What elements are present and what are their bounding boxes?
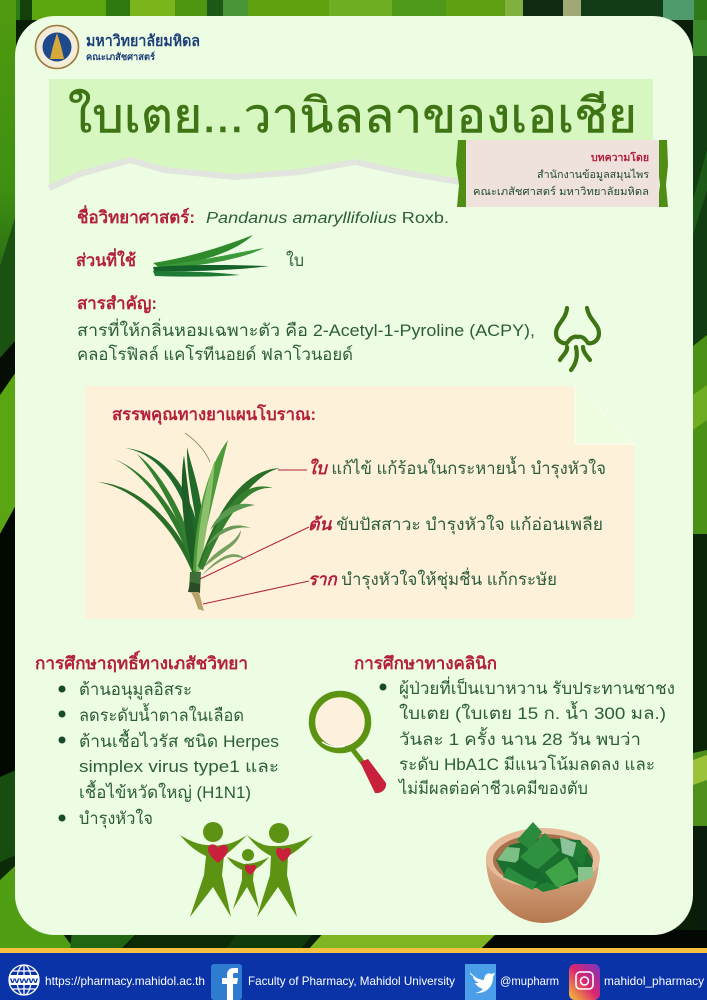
- icon: family with hearts: [180, 822, 313, 917]
- footer: twitter: [465, 964, 559, 1000]
- text: part used: ใบ: [286, 250, 304, 270]
- list: pharmacological studies: ลดระดับน้ำตาลในเลือด: [79, 703, 244, 725]
- author box: คณะเภสัชศาสตร์ มหาวิทยาลัยมหิดล: [473, 185, 649, 198]
- list: clinical studies: ใบเตย (ใบเตย 15 ก. น้ำ 300 มล.): [399, 701, 666, 723]
- footer: website: https://pharmacy.mahidol.ac.th: [45, 974, 205, 988]
- bottom strip: [0, 930, 707, 950]
- footer: blue bar: [0, 953, 707, 1000]
- left strip: [0, 0, 75, 950]
- text: stem uses: ต้น ขับปัสสาวะ บำรุงหัวใจ แก้อ่อนเพลีย: [308, 514, 603, 535]
- university name: [86, 32, 200, 63]
- author box: สำนักงานข้อมูลสมุนไพร: [537, 168, 649, 181]
- image: bowl of cut pandan: [486, 822, 600, 923]
- icon: pandan leaves: [153, 235, 269, 277]
- list: pharmacological studies: simplex virus type1 และ: [79, 757, 279, 776]
- list: clinical studies: ไม่มีผลต่อค่าชีวเคมีของตับ: [397, 778, 588, 798]
- list: pharmacological studies: ต้านเชื้อไวรัส ชนิด Herpes: [79, 729, 279, 751]
- heading: pharmacological studies: การศึกษาฤทธิ์ทางเภสัชวิทยา: [35, 650, 248, 673]
- title: ใบเตย...วานิลลาของเอเชีย: [68, 88, 637, 143]
- footer: facebook: [211, 964, 455, 1000]
- part used label: ส่วนที่ใช้: [76, 248, 136, 270]
- list: pharmacological studies: [58, 680, 279, 829]
- top strip: [0, 0, 707, 20]
- list: pharmacological studies: เชื้อไข้หวัดใหญ่ (H1N1): [79, 780, 251, 802]
- university name: คณะเภสัชศาสตร์: [86, 51, 156, 63]
- footer: twitter: @mupharm: [500, 974, 559, 988]
- key compounds: สารสำคัญ:: [77, 294, 157, 314]
- author box: บทความโดย: [591, 151, 649, 164]
- scientific name: Pandanus amaryllifolius Roxb.: [206, 210, 449, 227]
- panel: traditional uses: [85, 386, 634, 619]
- logo: university seal: [36, 26, 78, 68]
- text: leaf uses: ใบ แก้ไข้ แก้ร้อนในกระหายน้ำ บำรุงหัวใจ: [308, 456, 606, 479]
- author box: [456, 140, 668, 207]
- university name: มหาวิทยาลัยมหิดล: [86, 32, 200, 50]
- icon: nose: [556, 308, 599, 370]
- heading: traditional uses: สรรพคุณทางยาแผนโบราณ:: [112, 404, 316, 425]
- title band with torn edge: [49, 79, 653, 188]
- illustration: pandan plant: [98, 433, 280, 611]
- list: clinical studies: วันละ 1 ครั้ง นาน 28 วัน พบว่า: [399, 727, 641, 749]
- footer: facebook: Faculty of Pharmacy, Mahidol University: [248, 974, 455, 988]
- text: root uses: ราก บำรุงหัวใจให้ชุ่มชื่น แก้กระษัย: [308, 567, 557, 590]
- key compounds: สารที่ให้กลิ่นหอมเฉพาะตัว คือ 2-Acetyl-1-Pyroline (ACPY),: [77, 318, 535, 340]
- list: clinical studies: ระดับ HbA1C มีแนวโน้มลดลง และ: [399, 754, 655, 774]
- footer: instagram: [569, 964, 704, 1000]
- scientific name: [77, 205, 449, 227]
- list: pharmacological studies: ต้านอนุมูลอิสระ: [79, 680, 192, 700]
- list: pharmacological studies: บำรุงหัวใจ: [79, 808, 153, 829]
- footer: yellow stripe: [0, 948, 707, 953]
- list: clinical studies: ผู้ป่วยที่เป็นเบาหวาน รับประทานชาชง: [399, 676, 675, 699]
- footer: website: [9, 965, 205, 995]
- leader lines: [200, 470, 309, 604]
- key compounds: [77, 294, 535, 364]
- icon: magnifying glass: [312, 694, 386, 793]
- list: clinical studies: [380, 676, 675, 798]
- heading: clinical studies: การศึกษาทางคลินิก: [354, 654, 497, 673]
- footer: website: www: [9, 976, 39, 985]
- footer: instagram: mahidol_pharmacy: [604, 974, 704, 988]
- right strip: [693, 20, 707, 950]
- scientific name: ชื่อวิทยาศาสตร์:: [77, 205, 195, 227]
- key compounds: คลอโรฟิลล์ แคโรทีนอยด์ ฟลาโวนอยด์: [77, 344, 353, 364]
